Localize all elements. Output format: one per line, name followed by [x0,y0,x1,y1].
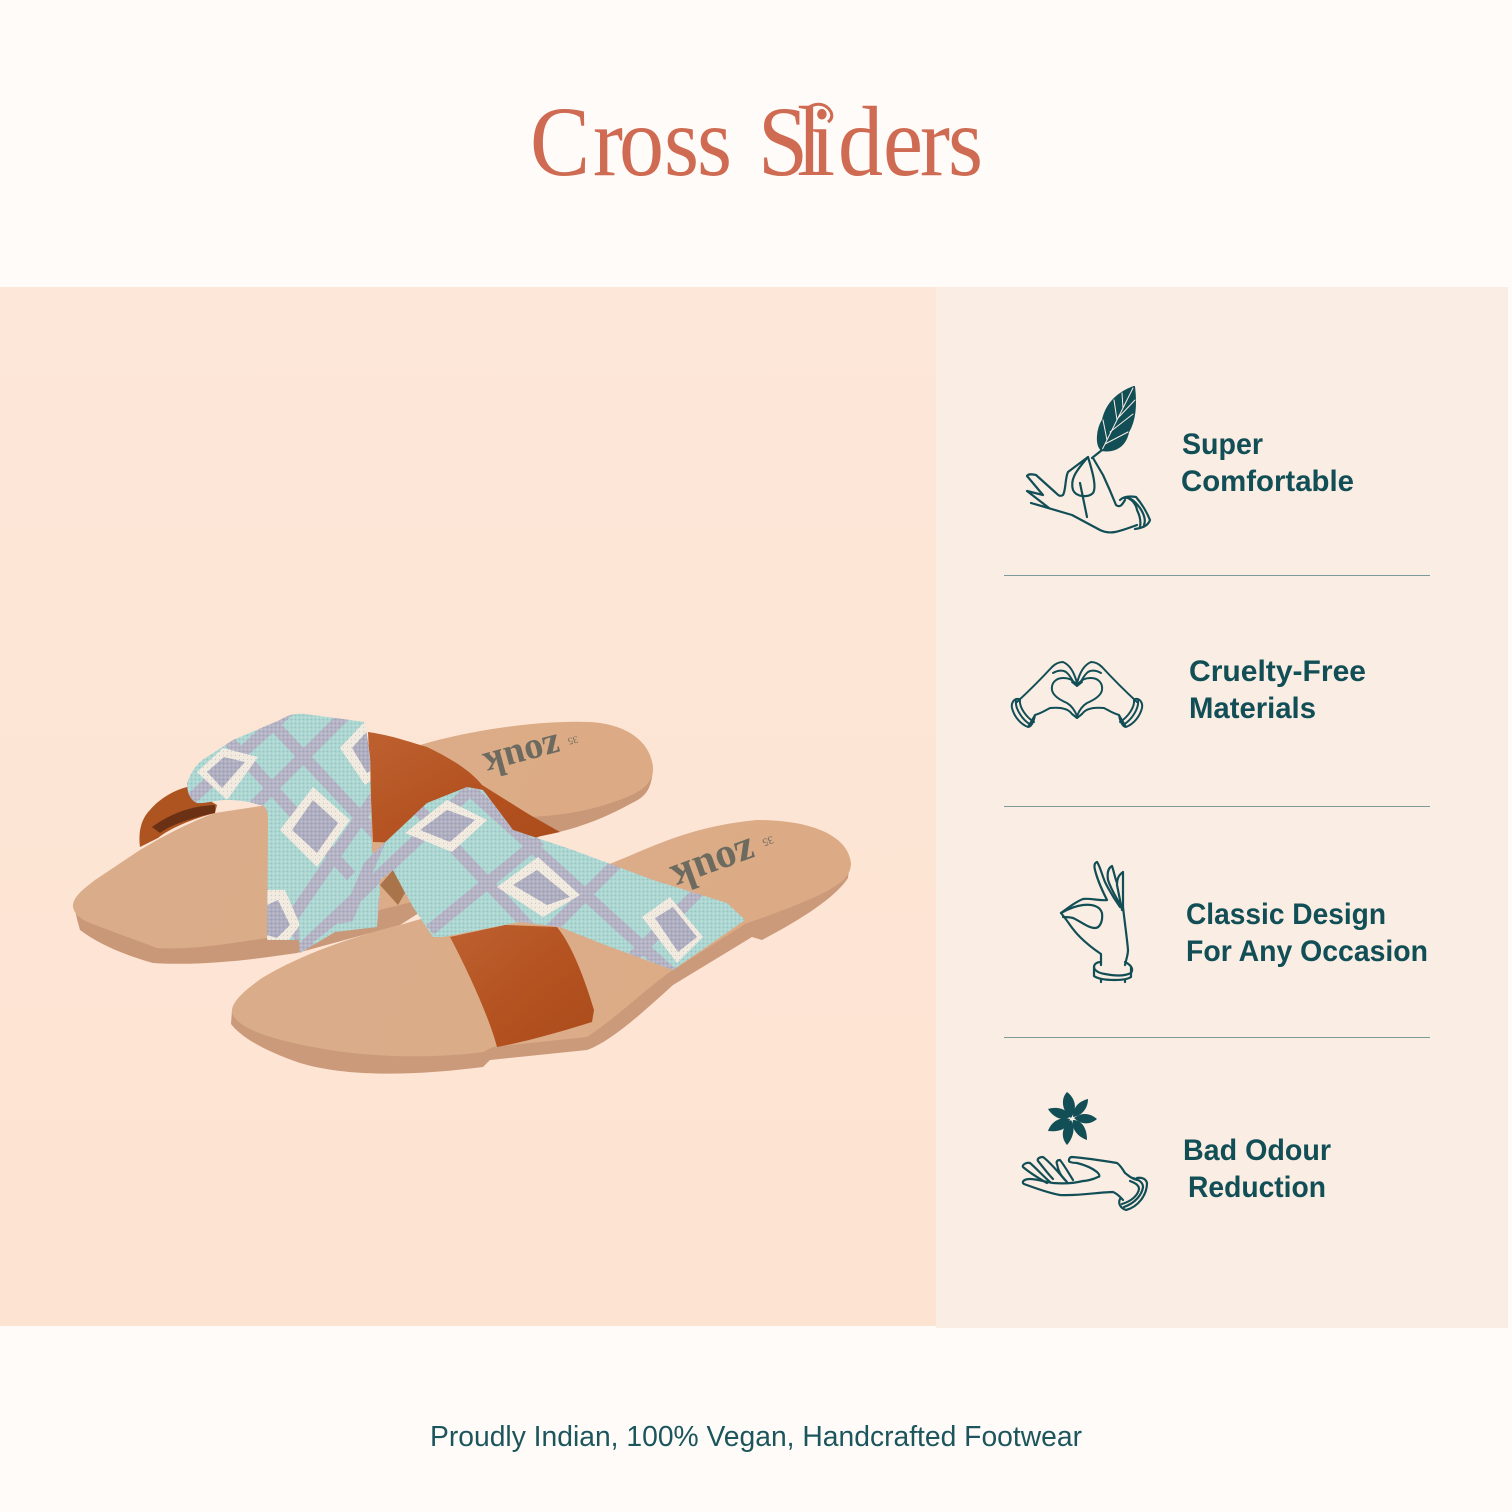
feature label [1183,1134,1331,1204]
title: Cross Sliders [530,86,983,197]
diamond motifs [280,787,350,867]
panel: product photo [0,287,936,1326]
front footbed [232,820,851,1056]
panel: features [936,287,1508,1328]
front brand mark: zouk [665,829,762,902]
feature: classic design [1061,862,1428,982]
footer tagline: Proudly Indian, 100% Vegan, Handcrafted Footwear [430,1421,1082,1453]
icon: heart hands [1012,662,1142,727]
rear sole edge [74,760,653,964]
sandal: rear [73,700,653,964]
icon: hand holding leaf [1027,387,1150,532]
rear brand mark: zouk [478,725,566,786]
feature label: Cruelty-Free [1189,655,1366,688]
icon: ok hand [1061,862,1132,982]
rear footbed [73,722,653,948]
feature: cruelty-free [1012,655,1366,727]
feature label [1181,428,1354,498]
rear strap shadow [152,805,215,833]
feature: comfortable [1027,387,1354,532]
icon: flower [1048,1092,1097,1145]
photo backdrop [0,287,936,1326]
feature label: Super [1182,428,1263,461]
sandal: front [231,780,851,1074]
rear fabric strap [187,714,380,953]
feature label: Classic Design [1186,898,1386,931]
lattice [188,714,380,950]
feature: odour reduction [1023,1092,1331,1210]
feature label: Comfortable [1181,465,1354,498]
knot shadow [380,870,405,905]
diamond motifs [405,800,487,852]
rear brand mark: 35 [567,733,579,746]
icon: open hand [1023,1157,1147,1210]
front leather strap [450,925,594,1047]
lattice [290,790,700,990]
panel background [936,287,1508,1328]
feature label [1189,655,1366,725]
rear leather strap, upper [368,732,560,845]
feature label [1186,898,1428,968]
feature label: For Any Occasion [1186,935,1428,968]
feature label: Bad Odour [1183,1134,1331,1167]
front brand mark: 35 [760,833,775,848]
front sole edge [231,860,850,1074]
front fabric strap [299,787,745,970]
rear leather strap, lower loop [139,787,217,847]
feature label: Materials [1189,692,1316,725]
feature label: Reduction [1188,1171,1326,1204]
